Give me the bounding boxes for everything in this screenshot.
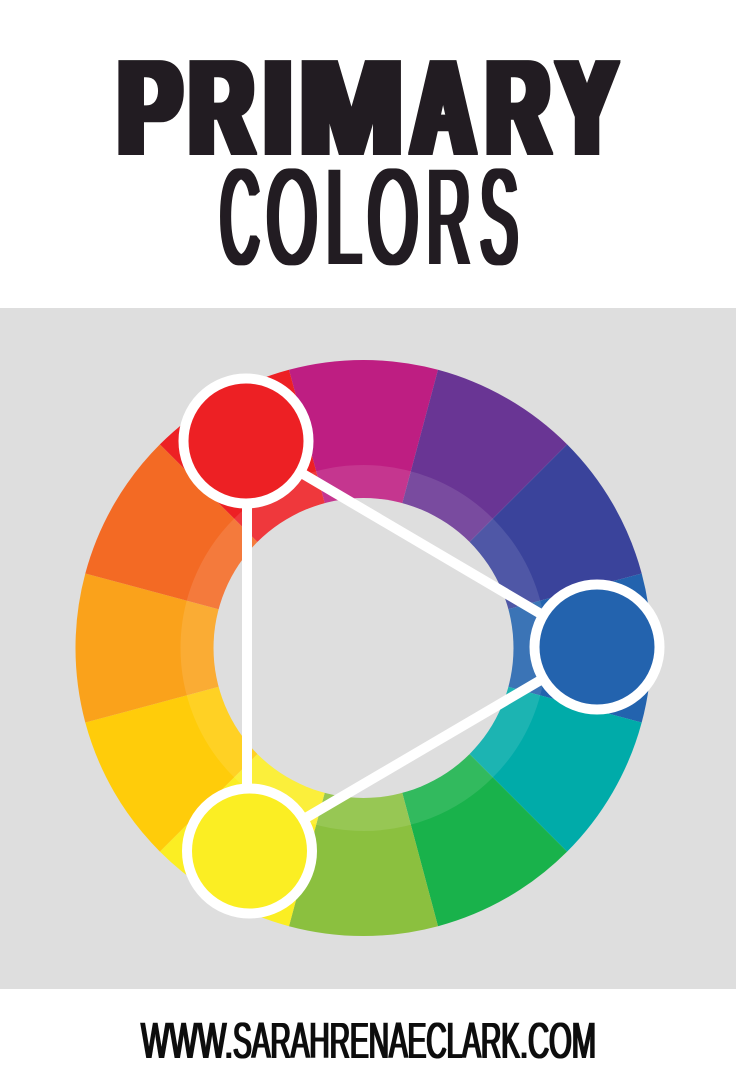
footer: website URL: WWW. — [141, 1012, 233, 1069]
panel: gray background — [0, 308, 736, 989]
triangle connecting primary colors — [247, 441, 597, 851]
segment: lime — [289, 648, 438, 936]
segment: red — [160, 370, 364, 648]
subtitle: COLORS: L — [326, 141, 361, 294]
title: PRIMARY: R — [190, 32, 253, 183]
marker: yellow primary — [187, 788, 312, 914]
segment: teal — [364, 648, 642, 852]
wheel center hole — [214, 498, 514, 798]
footer: website URL: .COM — [520, 1012, 596, 1069]
title: PRIMARY: R — [487, 32, 549, 183]
segment: red-orange — [85, 444, 364, 648]
title: PRIMARY: Y — [558, 32, 616, 183]
subtitle: COLORS: O — [368, 141, 418, 294]
segment: indigo — [364, 444, 642, 648]
title: PRIMARY: M — [299, 32, 403, 183]
segment: blue — [364, 574, 652, 722]
inner translucent ring — [197, 482, 530, 814]
segment: purple — [364, 370, 567, 648]
title: PRIMARY: A — [412, 32, 474, 183]
segment: orange — [75, 574, 364, 722]
infographic canvas: S — [480, 141, 518, 294]
marker: red primary — [184, 378, 308, 504]
subtitle: COLORS: O — [267, 141, 317, 294]
subtitle: COLORS: R — [427, 141, 470, 294]
color wheel — [75, 360, 652, 936]
title: PRIMARY: I — [264, 32, 292, 183]
marker: blue primary — [534, 584, 660, 710]
title: PRIMARY: P — [118, 32, 181, 183]
segment: magenta — [289, 360, 438, 648]
segment: golden yellow — [85, 648, 364, 852]
subtitle: COLORS: C — [220, 141, 259, 294]
segment: green — [364, 648, 567, 926]
segment: yellow — [160, 648, 364, 926]
